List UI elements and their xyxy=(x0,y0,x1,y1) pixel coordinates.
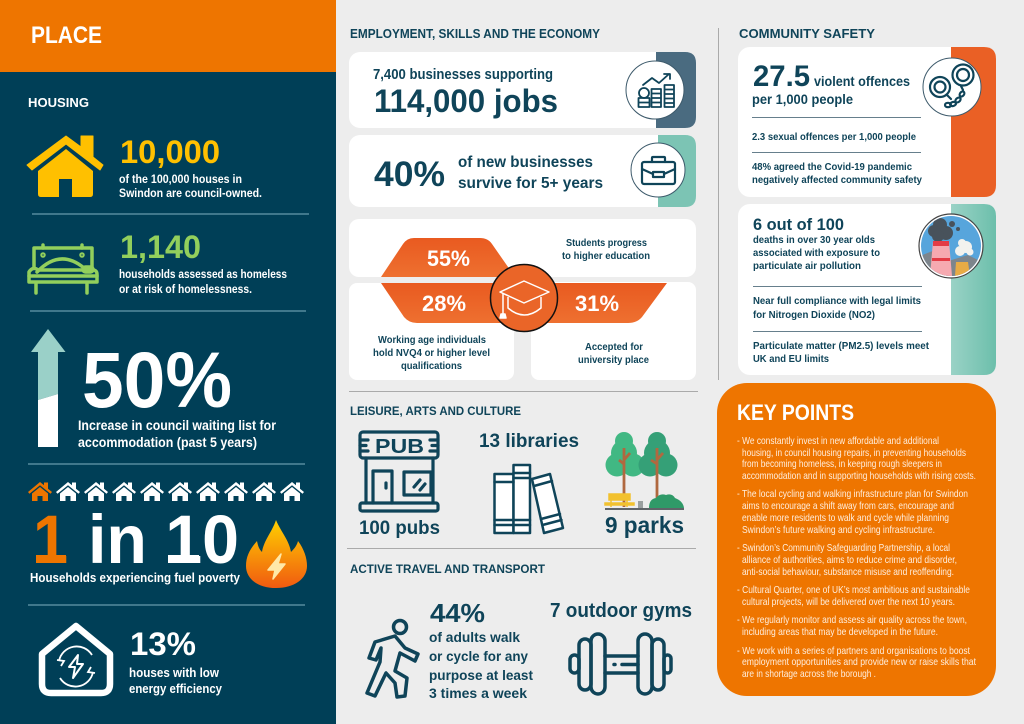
text: nitrogen dioxide: Near full compliance with legal limits xyxy=(753,295,921,307)
icon: energy efficient house xyxy=(42,626,110,693)
stat: 27.5 violent offences: 27.5 xyxy=(753,60,810,93)
stat: 13% low efficiency: 13% xyxy=(130,626,196,662)
shape: upper band xyxy=(381,238,515,277)
card: jobs xyxy=(349,52,696,128)
panel: education stats xyxy=(349,219,696,380)
text: cycling and walking: Swindon’s future walking and cycling infrastructure. xyxy=(742,525,935,536)
text: cycling and walking xyxy=(737,489,968,536)
text: air quality: - We regularly monitor and assess air quality across the town, xyxy=(737,615,967,626)
text: housing investment: - We constantly invest in new affordable and additional xyxy=(737,436,939,447)
icon: briefcase xyxy=(631,143,685,197)
icon: green bed xyxy=(29,245,97,293)
heading: housing: HOUSING xyxy=(28,96,89,110)
icon row: ten houses xyxy=(28,482,304,501)
icon: factory pollution xyxy=(919,214,983,278)
label: 13 libraries: 13 libraries xyxy=(479,431,579,452)
text: cycling and walking: - The local cycling and walking infrastructure plan for Swindon xyxy=(737,489,968,500)
icon: up arrow xyxy=(31,329,66,447)
card: accepted xyxy=(531,282,696,380)
stat: 31%: 31% xyxy=(575,291,619,316)
text: cycling and walking: enable more residents to walk and cycle while planning xyxy=(742,513,949,524)
stat: 6 out of 100: deaths in over 30 year olds xyxy=(753,234,875,246)
card: working age xyxy=(349,283,514,380)
stat: 44% walk or cycle: or cycle for any xyxy=(429,648,528,664)
text: particulate matter xyxy=(753,340,929,365)
icon: yellow house xyxy=(27,136,103,197)
stat: 50% waiting list xyxy=(78,335,277,450)
stat: 44% walk or cycle: 3 times a week xyxy=(429,685,527,701)
label: 100 pubs: 100 pubs xyxy=(359,518,440,539)
header band xyxy=(0,0,336,72)
text: safeguarding: anti-social behaviour, substance misuse and reoffending. xyxy=(742,567,954,578)
text: 114,000 jobs: 114,000 jobs xyxy=(374,83,558,119)
text: accepted: university place xyxy=(578,354,649,366)
stat: 50% waiting list: 50% xyxy=(82,335,232,424)
stat: 13% low efficiency: houses with low xyxy=(129,666,219,680)
stat: 27.5 violent offences: per 1,000 people xyxy=(752,91,853,107)
text: housing investment: accommodation and in supporting households with rising costs. xyxy=(742,471,976,482)
stat: 1 in 10 fuel poverty: Households experiencing fuel poverty xyxy=(30,570,241,585)
label: 7 outdoor gyms: 7 outdoor gyms xyxy=(550,600,692,622)
stat: 44% walk or cycle: of adults walk xyxy=(429,629,520,645)
icon: books xyxy=(494,465,563,533)
text: partners xyxy=(737,646,976,680)
text: partners: employment opportunities and provide new or raise skills that xyxy=(742,657,976,668)
stat: 44% walk or cycle: 44% xyxy=(430,598,485,628)
text: students progress: Students progress xyxy=(566,237,647,249)
text: students progress: to higher education xyxy=(562,250,650,262)
stat: 1 in 10 fuel poverty: in 10 xyxy=(88,501,239,578)
text: cultural quarter xyxy=(737,585,970,608)
card: air pollution xyxy=(738,204,996,375)
text: covid xyxy=(752,161,922,186)
panel: key points xyxy=(717,383,996,696)
text: sexual offences: 2.3 sexual offences per 1,000 people xyxy=(752,131,916,143)
text: housing investment xyxy=(737,436,976,482)
card: students progress xyxy=(349,219,696,277)
icon: walker xyxy=(367,620,418,697)
text: cultural quarter: - Cultural Quarter, one of UK’s most ambitious and sustainable xyxy=(737,585,970,596)
text: particulate matter: UK and EU limits xyxy=(753,353,829,365)
icon: pub xyxy=(360,432,438,511)
stat: 1,140 homeless households: households assessed as homeless xyxy=(119,267,287,281)
title: place: PLACE xyxy=(31,22,102,49)
icon: handcuffs xyxy=(923,58,981,116)
text: survive: of new businesses xyxy=(458,154,593,171)
stat: 6 out of 100: associated with exposure to xyxy=(753,247,880,259)
stat: 50% waiting list: accommodation (past 5 years) xyxy=(78,435,257,450)
text: cycling and walking: aims to encourage a shift away from cars, encourage and xyxy=(742,501,954,512)
text: air quality: including areas that may be developed in the future. xyxy=(742,627,938,638)
text: students progress xyxy=(562,237,650,262)
stat: 1 in 10 fuel poverty: 1 xyxy=(33,501,68,578)
text: working age: hold NVQ4 or higher level xyxy=(373,347,490,359)
heading: active travel: ACTIVE TRAVEL AND TRANSPORT xyxy=(350,564,545,576)
text: covid: negatively affected community safety xyxy=(752,174,922,186)
text: accepted xyxy=(578,341,649,366)
stat: 1,140 homeless households: 1,140 xyxy=(120,229,201,265)
shape: lower band xyxy=(381,283,667,323)
stat: 6 out of 100 xyxy=(753,215,880,272)
text: accepted: Accepted for xyxy=(585,341,643,353)
text: survive xyxy=(458,154,603,192)
stat: 28%: 28% xyxy=(422,291,466,316)
text: working age xyxy=(373,334,490,372)
text: particulate matter: Particulate matter (PM2.5) levels meet xyxy=(753,340,929,352)
card: new businesses xyxy=(349,135,696,207)
stat: 55%: 55% xyxy=(427,246,470,271)
text: housing investment: housing, in council housing repairs, in preventing households xyxy=(742,448,966,459)
heading: employment: EMPLOYMENT, SKILLS AND THE ECONOMY xyxy=(350,27,601,41)
stat: 6 out of 100: particulate air pollution xyxy=(753,260,861,272)
icon: flame xyxy=(246,520,307,588)
label: 9 parks: 9 parks xyxy=(605,512,684,538)
text: nitrogen dioxide: for Nitrogen Dioxide (NO2) xyxy=(753,309,875,321)
stat: 27.5 violent offences xyxy=(752,60,910,107)
text: safeguarding: - Swindon’s Community Safeguarding Partnership, a local xyxy=(737,543,950,554)
icon: dumbbell xyxy=(570,634,671,694)
text: 40%: 40% xyxy=(374,155,445,194)
stat: 6 out of 100: 6 out of 100 xyxy=(753,215,844,234)
stat: 10,000 council houses: of the 100,000 houses in xyxy=(119,172,242,186)
heading: community safety: COMMUNITY SAFETY xyxy=(739,26,875,41)
stat: 1,140 homeless households xyxy=(119,229,287,296)
text: housing investment: from becoming homeless, in keeping rough sleepers in xyxy=(742,459,942,470)
text: working age: Working age individuals xyxy=(378,334,486,346)
stat: 27.5 violent offences: violent offences xyxy=(814,73,910,89)
text: partners: are in shortage across the borough . xyxy=(742,669,876,680)
icon: pub: PUB xyxy=(375,436,424,458)
stat: 10,000 council houses: 10,000 xyxy=(120,134,220,170)
stat: 13% low efficiency: energy efficiency xyxy=(129,682,222,696)
stat: 44% walk or cycle xyxy=(429,598,533,701)
stat: 10,000 council houses: Swindon are council-owned. xyxy=(119,186,262,200)
icon: trees and park xyxy=(605,432,684,509)
text: partners: - We work with a series of partners and organisations to boost xyxy=(737,646,970,657)
text: covid: 48% agreed the Covid-19 pandemic xyxy=(752,161,912,173)
icon: graduation cap xyxy=(490,264,558,332)
stat: 1 in 10 fuel poverty xyxy=(30,501,241,585)
stat: 10,000 council houses xyxy=(119,134,262,200)
text: safeguarding: alliance of authorities, aims to reduce crime and disorder, xyxy=(742,555,957,566)
text: safeguarding xyxy=(737,543,957,578)
panel: place housing xyxy=(0,0,336,724)
text: businesses: 7,400 businesses supporting xyxy=(373,67,553,83)
heading: leisure: LEISURE, ARTS AND CULTURE xyxy=(350,406,521,418)
text: nitrogen dioxide xyxy=(753,295,921,321)
card: violent offences xyxy=(738,47,996,197)
text: survive: survive for 5+ years xyxy=(458,175,603,192)
text: cultural quarter: cultural projects, will be delivered over the next 10 years. xyxy=(742,597,955,608)
icon: coin chart xyxy=(626,61,684,119)
stat: 44% walk or cycle: purpose at least xyxy=(429,667,533,683)
heading: key points: KEY POINTS xyxy=(737,400,854,425)
stat: 50% waiting list: Increase in council waiting list for xyxy=(78,418,277,433)
text: working age: qualifications xyxy=(401,360,462,372)
stat: 1,140 homeless households: or at risk of homelessness. xyxy=(119,282,252,296)
text: air quality xyxy=(737,615,967,638)
stat: 13% low efficiency xyxy=(129,626,222,696)
